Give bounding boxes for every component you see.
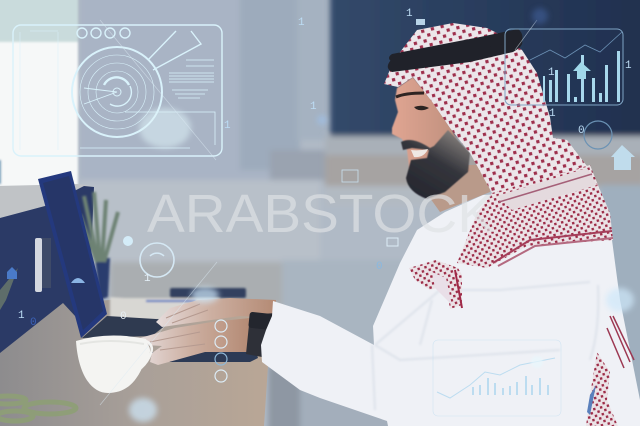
notebook and phone on desk <box>110 288 246 320</box>
floating digits and small icons: 0 <box>30 317 37 329</box>
green rings on desk <box>0 396 76 421</box>
radar circles <box>72 31 201 137</box>
floating digits and small icons: 1 <box>298 17 305 29</box>
eye and brow <box>396 93 429 110</box>
scarf hanging at right <box>586 316 634 426</box>
face <box>392 77 470 198</box>
floating digits and small icons: 0 <box>376 261 383 273</box>
smile <box>411 149 428 157</box>
floating digits and small icons: 1 <box>548 67 555 79</box>
keffiyeh knot at chest <box>409 260 462 309</box>
dark reflective panel at left <box>0 184 94 353</box>
floating digits and small icons: 1 <box>224 120 231 132</box>
floating digits and small icons: 1 <box>310 101 317 113</box>
panel frame <box>13 25 222 156</box>
tablet under hands <box>150 352 258 362</box>
floating digits and small icons <box>7 8 632 329</box>
floating digits and small icons: 1 <box>18 310 25 322</box>
data lines <box>80 60 215 148</box>
floating digits and small icons: 1 <box>144 273 151 285</box>
holographic radar panel <box>13 25 222 156</box>
floating digits and small icons: 1 <box>625 60 632 72</box>
plant <box>80 192 118 300</box>
holographic line chart on sleeve <box>433 340 561 416</box>
floating digits and small icons: 1 <box>406 8 413 20</box>
agal black head cord <box>388 29 522 72</box>
man: white thobe <box>261 190 640 426</box>
holographic camera ring and house icon <box>584 121 635 170</box>
keffiyeh striped band <box>457 165 613 268</box>
keffiyeh headdress <box>384 23 590 193</box>
neck <box>430 165 490 212</box>
diagonal light streaks <box>100 20 537 405</box>
house icon <box>573 62 591 79</box>
bars <box>543 51 620 102</box>
floating digits and small icons: 0 <box>120 311 127 323</box>
holographic speedometer ring <box>123 236 174 277</box>
chart line <box>530 32 622 60</box>
holographic bar chart panel <box>505 29 623 105</box>
laptop screen inner <box>43 176 103 330</box>
laptop <box>38 171 172 338</box>
beard <box>401 130 470 199</box>
laptop keyboard <box>82 316 172 338</box>
laptop screen <box>38 171 107 338</box>
holographic glow spots <box>129 8 634 422</box>
floating digits and small icons: 0 <box>578 125 585 137</box>
white coffee cup <box>76 335 152 393</box>
top icons <box>77 28 130 38</box>
floating digits and small icons: 1 <box>549 108 556 120</box>
desk surface <box>0 300 282 426</box>
bright window at left <box>0 0 78 187</box>
upper hand <box>156 298 276 327</box>
thobe shading folds <box>372 282 598 410</box>
person glow <box>20 31 58 150</box>
hand holographic circles <box>215 320 227 382</box>
smart watch <box>246 312 276 357</box>
dark window at upper right <box>325 0 640 426</box>
watermark ARABSTOCK: ARABSTOCK <box>147 184 495 244</box>
lower hand <box>140 318 250 365</box>
cloud glow <box>139 108 191 148</box>
chart frame <box>505 29 623 105</box>
